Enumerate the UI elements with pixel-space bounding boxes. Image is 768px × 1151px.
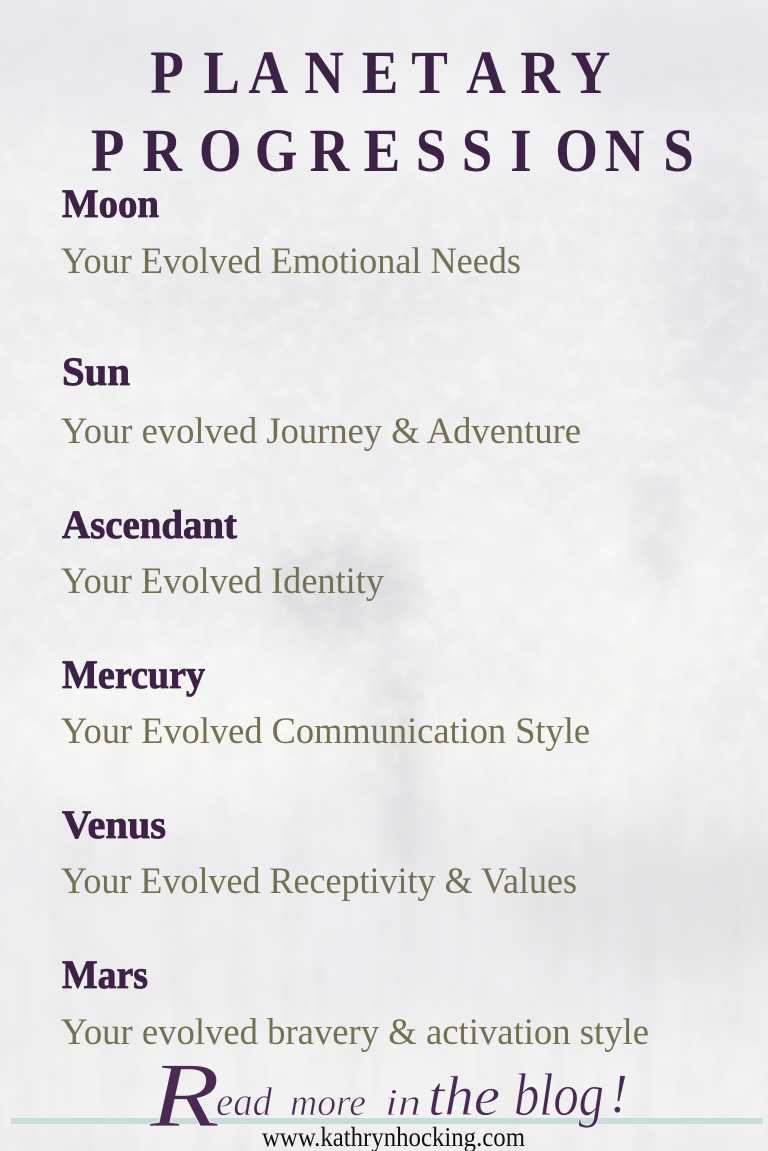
item: Sun [61,349,581,452]
item: Moon: Your Evolved Emotional Needs [61,241,521,282]
item: Mars [61,952,649,1053]
script call to action: ! [610,1063,628,1125]
item: Moon [61,181,521,282]
title: PLANETARY [150,38,610,107]
item: Sun: Sun [62,349,130,394]
item: Mercury: Your Evolved Communication Style [61,711,590,752]
script call to action: the [428,1066,500,1128]
title: PROGRESSIONS [91,116,694,185]
script call to action: more [290,1082,366,1124]
item: Ascendant: Your Evolved Identity [61,561,384,602]
script call to action: blog [514,1062,604,1128]
item: Mercury [61,652,590,752]
item: Mercury: Mercury [62,652,205,697]
item: Mars: Mars [62,952,148,997]
item: Venus: Your Evolved Receptivity & Values [61,861,577,902]
background: blurred lichen texture [25,33,768,976]
item: Moon: Moon [62,181,159,226]
script call to action: ead [216,1079,273,1124]
item: Venus: Venus [62,802,166,847]
item: Mars: Your evolved bravery & activation style [61,1012,649,1053]
footer band [11,1118,763,1124]
script call to action: in [385,1082,421,1124]
item: Sun: Your evolved Journey & Adventure [61,411,581,452]
item: Ascendant: Ascendant [62,502,238,547]
title [91,38,694,185]
item: Ascendant [61,502,384,602]
script call to action: R [149,1044,220,1146]
script call to action [149,1044,628,1146]
lighter speckle [298,224,748,712]
item: Venus [61,802,577,902]
